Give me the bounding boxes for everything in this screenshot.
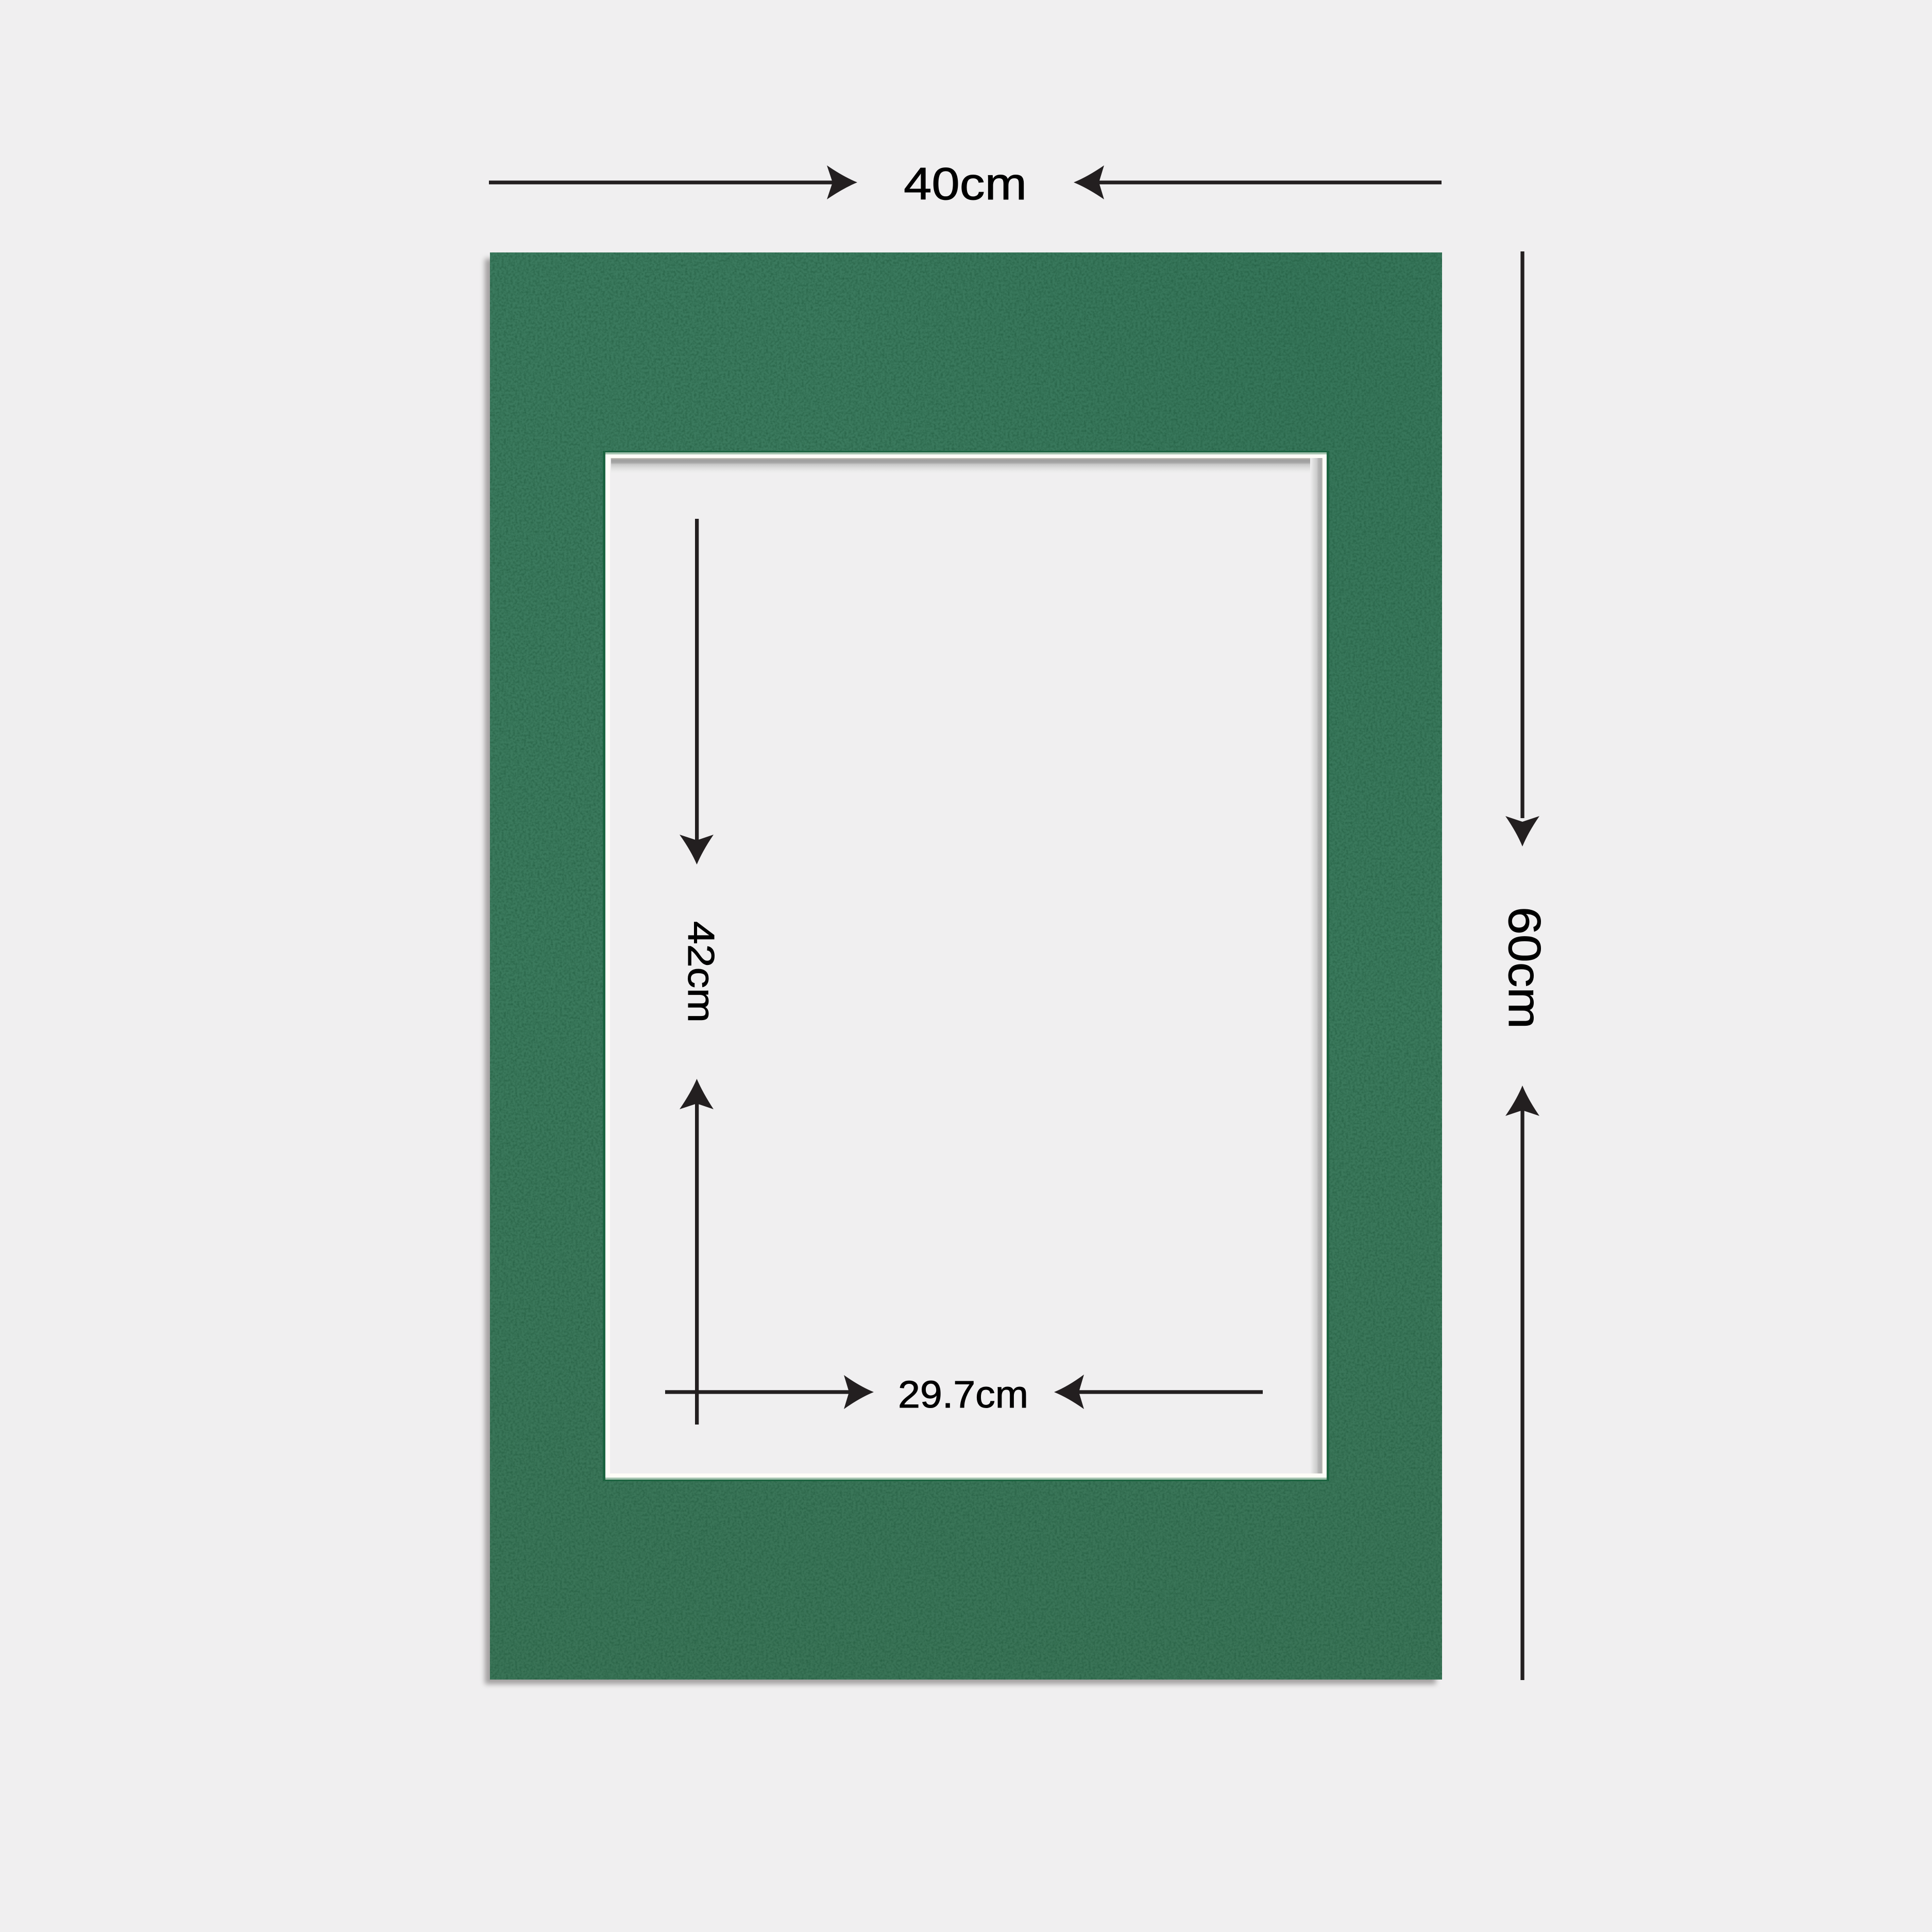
- arrow: aperture height, bottom: [680, 1079, 714, 1425]
- mount window opening: [603, 451, 1329, 1481]
- arrow: aperture height, top: [680, 519, 714, 865]
- arrow: overall width, left: [489, 165, 857, 199]
- arrow: overall height, top: [1505, 251, 1539, 846]
- label: 40cm: 40cm: [904, 158, 1027, 209]
- arrow: overall height, bottom: [1505, 1086, 1539, 1680]
- arrow: aperture width, left: [665, 1375, 874, 1409]
- label: 29.7cm: 29.7cm: [898, 1373, 1028, 1416]
- arrow: aperture width, right: [1054, 1375, 1263, 1409]
- panel: green mount board: [490, 252, 1442, 1680]
- label: 60cm: 60cm: [1499, 907, 1550, 1029]
- arrow: overall width, right: [1074, 165, 1442, 199]
- label: 42cm: 42cm: [680, 921, 721, 1023]
- mount drop shadow: [485, 259, 1436, 1684]
